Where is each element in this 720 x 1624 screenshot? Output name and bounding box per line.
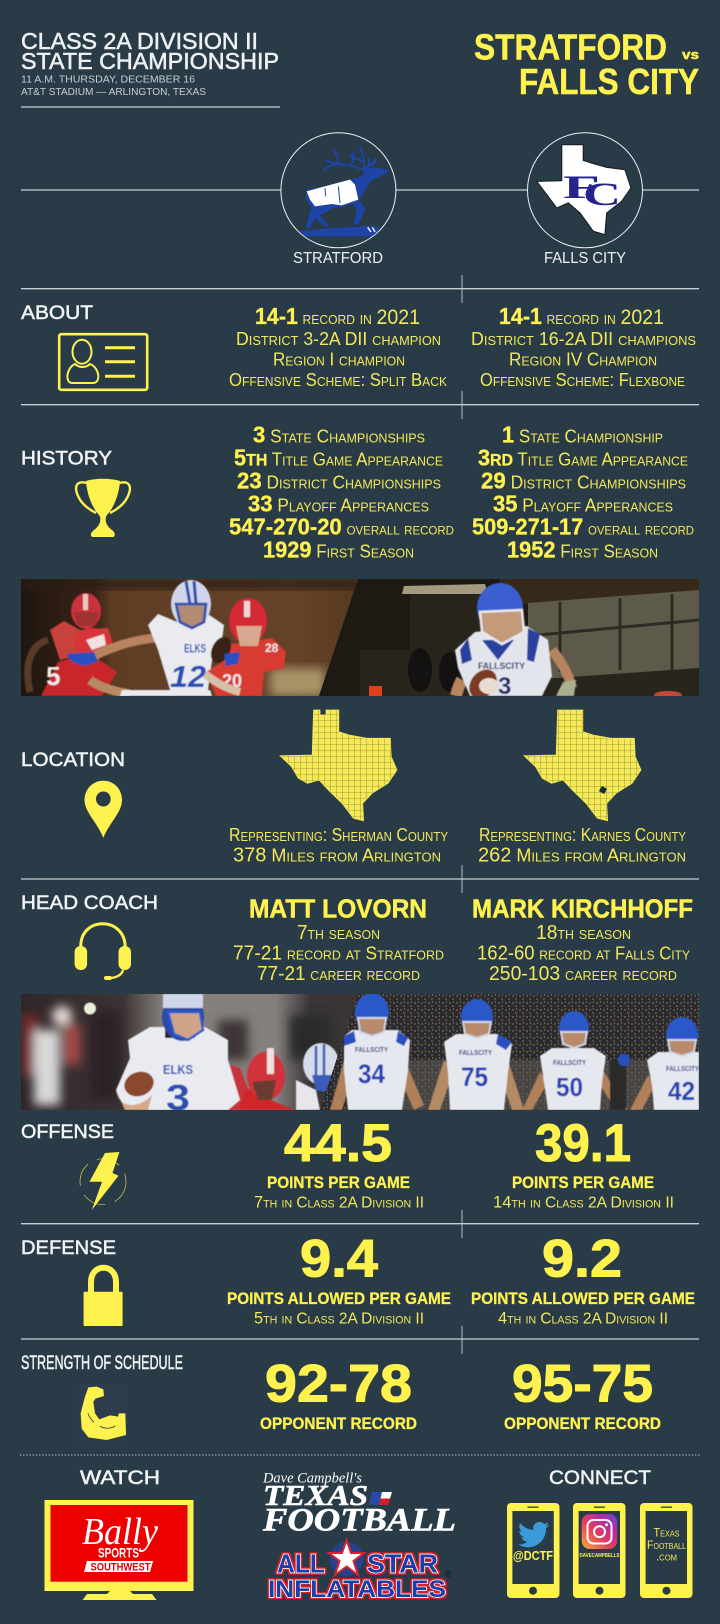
Falls City about [471, 303, 696, 390]
Falls City history: 3RD Title Game Appearance [478, 445, 688, 471]
Falls City about: 14-1 record in 2021 [499, 303, 664, 329]
Stratford location [229, 825, 448, 867]
Stratford history: 3 State Championships [253, 421, 425, 447]
icon: TV with Bally Sports [44, 1500, 194, 1600]
heading: Strength of schedule: STRENGTH OF SCHEDULE [21, 1352, 183, 1374]
player 75: 75 [461, 1062, 488, 1092]
Stratford about: Region I champion [273, 350, 405, 370]
Stratford schedule: 92-78 [265, 1355, 412, 1414]
photo band 1: 12 [170, 659, 206, 694]
icon: padlock [84, 1268, 123, 1326]
Falls City about: Offensive Scheme: Flexbone [480, 370, 685, 390]
photo band 1: ELKS [184, 644, 206, 656]
Falls City defense [471, 1230, 695, 1328]
Falls City location: 262 Miles from Arlington [478, 845, 686, 867]
logo: All Star Inflatables: STAR [367, 1549, 438, 1579]
header: game title: 11 A.M. THURSDAY, DECEMBER 16 [21, 74, 195, 86]
icon: lightning bolt [80, 1152, 126, 1210]
photo band 2: 3 [166, 1077, 190, 1118]
Falls City coach: 162-60 record at Falls City [477, 943, 690, 965]
Stratford offense [254, 1114, 424, 1212]
player 34: 34 [358, 1059, 385, 1089]
photo band 1: 5 [46, 661, 60, 691]
Stratford schedule [260, 1355, 417, 1433]
icon: phone, Instagram [573, 1503, 626, 1598]
icon: phone, Instagram: DAVECAMPBELLS [580, 1553, 620, 1559]
player 50 [522, 1011, 630, 1110]
antlers [323, 146, 377, 171]
Falls City defense: 4th in Class 2A Division II [498, 1309, 668, 1328]
Falls City coach: 18th season [536, 922, 631, 944]
Falls City coach: 250-103 career record [489, 963, 677, 985]
Falls City coach [472, 894, 693, 985]
heading: Location: LOCATION [21, 749, 125, 771]
header: game title: CLASS 2A DIVISION II [21, 28, 258, 54]
player 42: 42 [668, 1076, 695, 1106]
icon: TV with Bally Sports: SOUTHWEST [90, 1561, 151, 1573]
heading: Head coach: HEAD COACH [21, 892, 158, 914]
Falls City schedule: OPPONENT RECORD [504, 1414, 661, 1433]
heading: About: ABOUT [21, 302, 93, 324]
header: game title [21, 28, 279, 98]
elk body [306, 167, 390, 229]
header: matchup [474, 26, 699, 102]
map: Texas, Sherman County [280, 710, 397, 821]
Falls City offense [493, 1114, 674, 1212]
Stratford coach: 7th season [297, 922, 380, 944]
player 75 [428, 999, 524, 1110]
Stratford history: 547-270-20 overall record [229, 514, 454, 540]
Falls City history: 1 State Championship [502, 421, 663, 447]
logo: Dave Campbell's Texas Football: Dave Campbell's [262, 1471, 362, 1487]
Stratford history: 1929 First Season [263, 537, 414, 563]
icon: TV with Bally Sports: Bally [82, 1511, 158, 1553]
logo: All Star Inflatables [268, 1540, 452, 1603]
logo: Dave Campbell's Texas Football: FOOTBALL [262, 1503, 456, 1539]
Falls City history: 35 Playoff Apperances [493, 491, 673, 517]
Stratford about: Offensive Scheme: Split Back [229, 370, 447, 390]
heading: Defense: DEFENSE [21, 1237, 116, 1259]
Stratford offense: 44.5 [284, 1114, 392, 1173]
Falls City about: Region IV Champion [509, 350, 657, 370]
player 50: 50 [556, 1072, 583, 1102]
Stratford offense: POINTS PER GAME [267, 1173, 410, 1192]
header: matchup: vs [682, 47, 699, 62]
icon: flexed arm [79, 1384, 127, 1441]
label: Stratford: STRATFORD [293, 250, 383, 267]
Falls City coach: MARK KIRCHHOFF [472, 894, 693, 924]
Stratford defense: 9.4 [300, 1230, 379, 1289]
header: matchup: FALLS CITY [519, 61, 699, 102]
icon: phone, website: Football [647, 1538, 686, 1552]
player 50: FALLSCITY [553, 1058, 586, 1067]
Falls City history: 1952 First Season [507, 537, 658, 563]
Stratford coach: MATT LOVORN [249, 894, 427, 924]
header: game title: STATE CHAMPIONSHIP [21, 48, 279, 74]
player 34: FALLSCITY [355, 1045, 388, 1054]
logo: Falls City Texas [528, 133, 642, 248]
heading: Connect: CONNECT [549, 1467, 651, 1489]
logo: Stratford elk [281, 133, 396, 248]
Falls City history: 29 District Championships [481, 468, 686, 494]
Falls City location: Representing: Karnes County [479, 825, 686, 845]
logo: All Star Inflatables: INFLATABLES [268, 1576, 446, 1603]
heading: History: HISTORY [21, 447, 112, 469]
Stratford history: 23 District Championships [237, 468, 441, 494]
icon: headset [75, 924, 131, 980]
header: matchup: STRATFORD [474, 26, 667, 68]
Stratford about [229, 303, 447, 390]
Falls City schedule [504, 1355, 661, 1433]
heading: Watch: WATCH [80, 1467, 160, 1489]
photo band 1: FALLSCITY [478, 661, 526, 672]
Stratford about: 14-1 record in 2021 [255, 303, 420, 329]
Falls City history [472, 421, 694, 563]
icon: phone, website: .com [656, 1550, 677, 1564]
header: game title: AT&T STADIUM — ARLINGTON, TEXAS [21, 86, 206, 98]
player 75: FALLSCITY [459, 1048, 492, 1057]
photo band 2 [21, 993, 699, 1118]
Stratford coach: 77-21 career record [257, 963, 420, 985]
icon: phone, website: Texas [654, 1526, 680, 1540]
map: Texas, Karnes County [524, 710, 641, 821]
logo: Dave Campbell's Texas Football [262, 1471, 456, 1539]
Stratford offense: 7th in Class 2A Division II [254, 1193, 424, 1212]
Stratford coach [233, 894, 444, 985]
Falls City location [478, 825, 686, 867]
Stratford schedule: OPPONENT RECORD [260, 1414, 417, 1433]
icon: phone, website [640, 1503, 692, 1598]
logo: All Star Inflatables: ALL [277, 1549, 325, 1579]
Stratford defense: 5th in Class 2A Division II [254, 1309, 424, 1328]
photo band 1 [21, 579, 699, 704]
photo band 1: 28 [265, 641, 279, 655]
heading: Offense: OFFENSE [21, 1121, 114, 1143]
label: Falls City: FALLS CITY [544, 250, 626, 267]
Falls City history: 509-271-17 overall record [472, 514, 694, 540]
player 42 [630, 1017, 699, 1110]
Stratford defense: POINTS ALLOWED PER GAME [227, 1289, 451, 1308]
Stratford location: 378 Miles from Arlington [233, 845, 441, 867]
Falls City defense: 9.2 [542, 1230, 622, 1289]
icon: map pin [84, 781, 122, 838]
Stratford history [229, 421, 454, 563]
logo: All Star Inflatables: ® [445, 1569, 452, 1579]
Falls City offense: POINTS PER GAME [512, 1173, 654, 1192]
Stratford coach: 77-21 record at Stratford [233, 943, 444, 965]
Stratford about: District 3-2A DII champion [236, 329, 441, 349]
icon: phone, Twitter [507, 1503, 560, 1598]
icon: ID card [59, 334, 147, 390]
Falls City offense: 39.1 [535, 1114, 631, 1173]
icon: trophy [76, 479, 130, 537]
photo band 2: ELKS [163, 1062, 193, 1077]
Falls City about: District 16-2A DII champions [471, 329, 696, 349]
logo: Falls City Texas: F [563, 170, 600, 206]
Falls City offense: 14th in Class 2A Division II [493, 1193, 674, 1212]
Falls City schedule: 95-75 [512, 1355, 653, 1414]
player 42: FALLSCITY [666, 1064, 699, 1073]
Stratford history: 5TH Title Game Appearance [234, 445, 443, 471]
Stratford location: Representing: Sherman County [229, 825, 448, 845]
Stratford defense [227, 1230, 451, 1328]
Falls City defense: POINTS ALLOWED PER GAME [471, 1289, 695, 1308]
photo band 1: 3 [498, 673, 511, 700]
logo: Dave Campbell's Texas Football: TEXAS [263, 1480, 368, 1512]
Stratford history: 33 Playoff Apperances [248, 491, 429, 517]
icon: TV with Bally Sports: SPORTS [98, 1545, 139, 1561]
photo band 1: 20 [222, 671, 242, 691]
logo: Falls City Texas: C [583, 177, 621, 213]
icon: phone, Twitter: @DCTF [513, 1549, 553, 1563]
player 34 [330, 993, 424, 1110]
